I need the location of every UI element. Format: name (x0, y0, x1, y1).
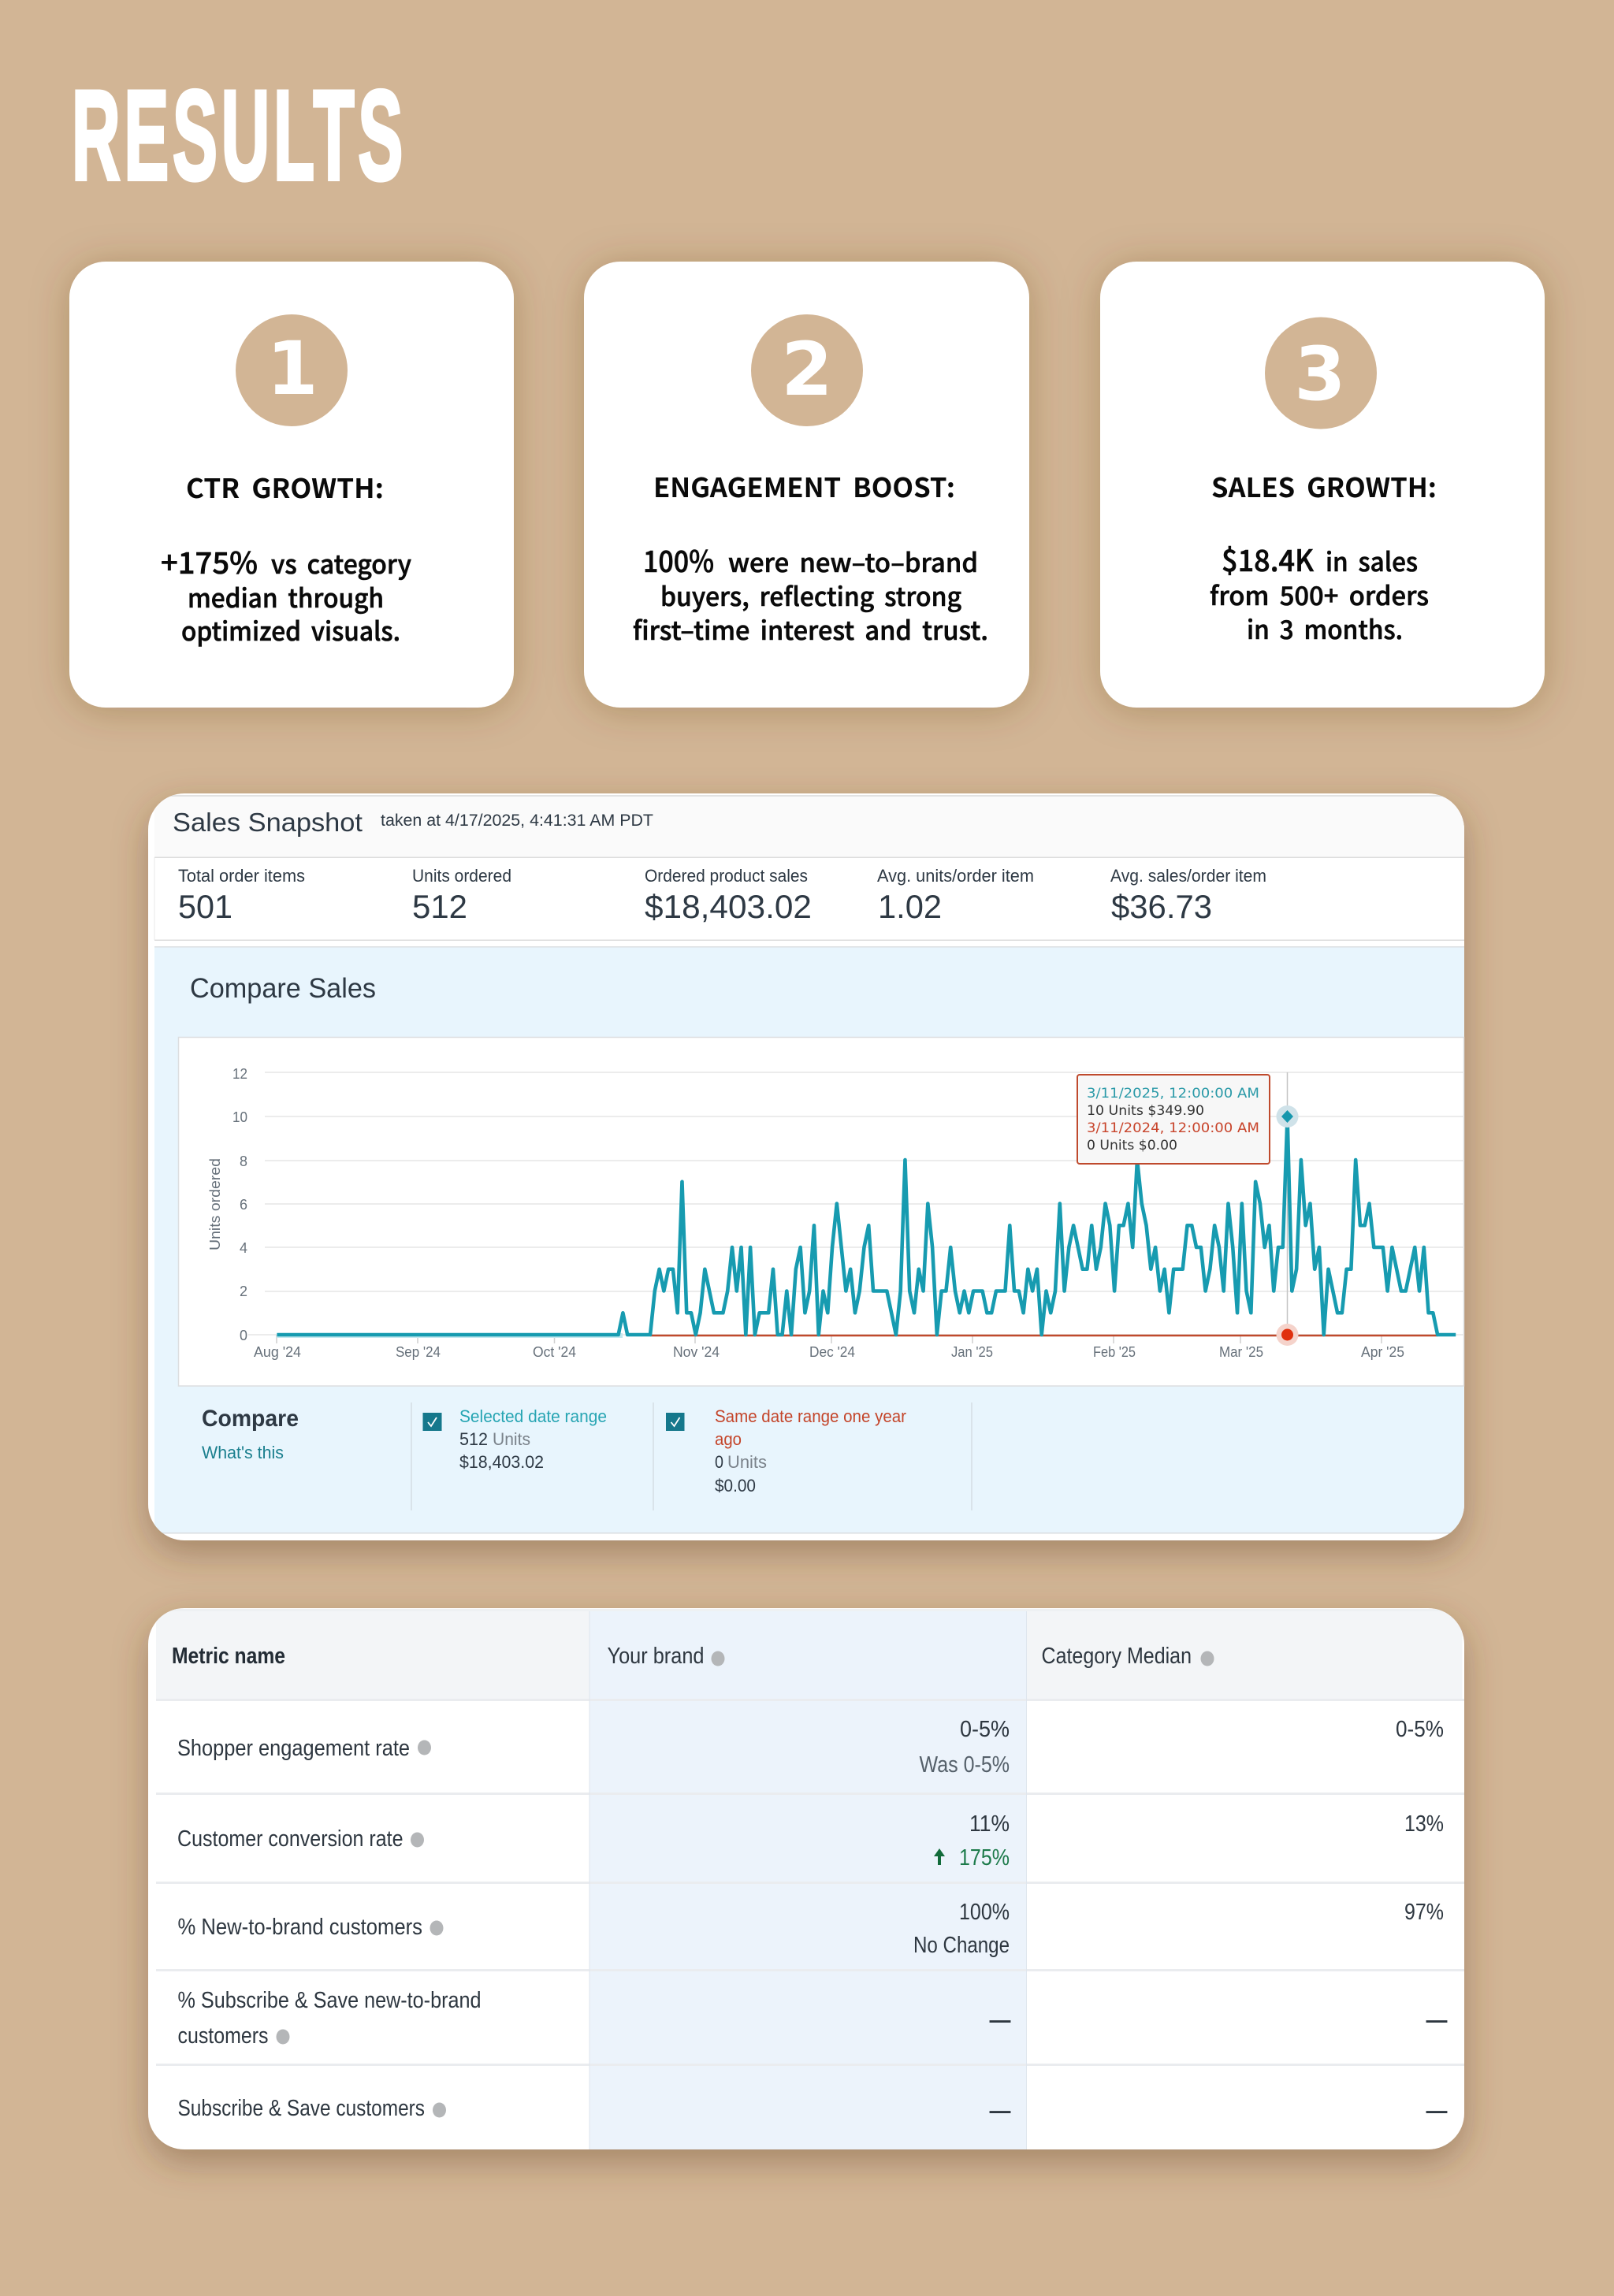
text block: engagement details: 100% (643, 537, 714, 581)
text block: sales details (1210, 537, 1429, 647)
line chart: units ordered (178, 1037, 1464, 1386)
legend: same date range one year ago: $0.00 (715, 1476, 756, 1495)
y axis labels: 4 (240, 1240, 247, 1256)
legend heading (202, 1406, 299, 1462)
metrics row (178, 866, 1266, 925)
row: subscribe and save new-to-brand customers: — (990, 2008, 1010, 2033)
y axis labels (232, 1066, 247, 1343)
panel: sales snapshot screenshot (148, 793, 1464, 1540)
x axis labels: Aug '24 (254, 1344, 301, 1360)
metrics row: 1.02 (878, 888, 942, 925)
heading: sales growth: SALES GROWTH: (1211, 466, 1437, 505)
metrics row: $36.73 (1111, 888, 1212, 925)
table header: Category Median (1042, 1644, 1192, 1669)
text block: CTR growth details: +175% (161, 539, 258, 582)
row: subscribe and save new-to-brand customers: % Subscribe & Save new-to-brand (178, 1988, 481, 2013)
icon: up arrow (934, 1848, 945, 1865)
icon: number 2 badge: 2 (781, 327, 833, 413)
legend: same date range one year ago: 0 (715, 1452, 723, 1472)
text block: CTR growth details: optimized visuals. (181, 611, 400, 648)
heading: sales snapshot (173, 808, 653, 837)
text block: CTR growth details: vs category (271, 544, 411, 581)
metrics row: Avg. units/order item (877, 866, 1034, 886)
row: new-to-brand customers: No Change (913, 1933, 1010, 1958)
row: customer conversion rate: 11% (969, 1811, 1010, 1837)
text block: sales details: in sales (1326, 541, 1418, 579)
legend: same date range one year ago: ago (715, 1429, 742, 1449)
metrics row: Avg. sales/order item (1110, 866, 1266, 886)
y axis title: Units ordered (207, 1158, 223, 1250)
row: subscribe and save customers: — (1426, 2098, 1447, 2123)
row: subscribe and save new-to-brand customers (178, 1988, 1447, 2049)
icon: number 3 badge (1265, 317, 1377, 429)
tooltip: 0 Units $0.00 (1087, 1138, 1177, 1154)
icon: number 3 badge: 3 (1294, 332, 1346, 418)
hover line (1286, 1072, 1288, 1335)
legend: same date range one year ago: Units (727, 1452, 767, 1472)
row: shopper engagement rate: Was 0-5% (919, 1752, 1010, 1778)
tooltip: 10 Units $349.90 (1087, 1103, 1204, 1119)
icon: number 2 badge (751, 314, 863, 426)
row: customer conversion rate: Customer conversion rate (177, 1826, 404, 1852)
heading: compare sales: Compare Sales (190, 973, 376, 1004)
row: customer conversion rate (177, 1811, 1444, 1871)
legend: same date range one year ago: Same date range one year (715, 1406, 906, 1426)
row: subscribe and save customers: Subscribe & Save customers (178, 2096, 425, 2121)
legend heading: Compare (202, 1406, 299, 1432)
icon: number 1 badge: 1 (266, 326, 318, 412)
tooltip: 3/11/2024, 12:00:00 AM (1087, 1120, 1259, 1136)
table header: Your brand (607, 1644, 705, 1669)
heading: CTR growth: CTR GROWTH: (186, 467, 384, 506)
title: RESULTS (72, 65, 407, 206)
row: customer conversion rate: 13% (1404, 1811, 1444, 1837)
row: shopper engagement rate: Shopper engagement rate (177, 1736, 410, 1761)
x axis labels: Nov '24 (673, 1344, 720, 1360)
y axis labels: 10 (232, 1109, 247, 1125)
row: subscribe and save customers: — (990, 2098, 1010, 2123)
legend: selected date range (422, 1406, 607, 1472)
marker: prior year point (1277, 1324, 1299, 1346)
row: new-to-brand customers (178, 1900, 1444, 1958)
metrics row: $18,403.02 (645, 888, 812, 925)
row: new-to-brand customers: % New-to-brand customers (178, 1915, 422, 1940)
table header: Metric name (172, 1644, 285, 1669)
legend: same date range one year ago (666, 1406, 906, 1495)
legend: selected date range: Selected date range (459, 1406, 607, 1426)
heading: engagement boost: ENGAGEMENT BOOST: (653, 466, 955, 505)
tooltip (1077, 1075, 1270, 1164)
legend: selected date range: 512 (459, 1429, 488, 1449)
row: shopper engagement rate: 0-5% (1396, 1717, 1444, 1742)
compare legend (202, 1402, 972, 1510)
y axis labels: 8 (240, 1154, 247, 1169)
heading: sales snapshot: Sales Snapshot (173, 808, 363, 837)
metrics row: Total order items (178, 866, 305, 886)
row: new-to-brand customers: 97% (1404, 1900, 1444, 1925)
row: customer conversion rate: 175% (959, 1845, 1010, 1871)
table header (172, 1644, 1214, 1669)
text block: sales details: $18.4K (1222, 537, 1315, 580)
x axis labels (254, 1344, 1404, 1360)
y axis labels: 12 (232, 1066, 247, 1082)
metrics row: 512 (412, 888, 467, 925)
y axis labels: 6 (240, 1197, 247, 1213)
x axis labels: Sep '24 (396, 1344, 441, 1360)
tooltip: 3/11/2025, 12:00:00 AM (1087, 1086, 1259, 1102)
text block: engagement details (633, 537, 988, 648)
x axis labels: Apr '25 (1361, 1344, 1404, 1360)
text block: CTR growth details: median through (188, 578, 384, 615)
row: shopper engagement rate (177, 1717, 1444, 1778)
y axis labels: 2 (240, 1284, 247, 1299)
text block: engagement details: were new–to–brand (728, 542, 978, 580)
row: subscribe and save customers (178, 2096, 1447, 2123)
text block: sales details: from 500+ orders (1210, 575, 1429, 613)
legend heading: What's this (202, 1443, 284, 1462)
series: same date range one year ago (650, 1335, 1437, 1336)
text block: sales details: in 3 months. (1247, 609, 1403, 647)
x axis labels: Jan '25 (951, 1344, 993, 1360)
metrics row: Units ordered (412, 866, 511, 886)
icon: number 1 badge (236, 314, 348, 426)
heading: sales snapshot: taken at 4/17/2025, 4:41:31 AM PDT (381, 812, 653, 830)
text block: CTR growth details (161, 539, 411, 648)
row: shopper engagement rate: 0-5% (960, 1717, 1010, 1742)
x axis labels: Oct '24 (533, 1344, 576, 1360)
marker: selected date point (1277, 1105, 1299, 1128)
x axis labels: Mar '25 (1219, 1344, 1263, 1360)
legend: selected date range: $18,403.02 (459, 1452, 544, 1472)
x axis labels: Feb '25 (1093, 1344, 1136, 1360)
row: subscribe and save new-to-brand customers: customers (178, 2023, 268, 2049)
row: subscribe and save new-to-brand customers: — (1426, 2008, 1447, 2033)
panel: engagement boost card (584, 262, 1029, 708)
panel: CTR growth card (69, 262, 514, 708)
series: selected date range (277, 1116, 1456, 1335)
metrics row: Ordered product sales (645, 866, 808, 886)
text block: engagement details: buyers, reflecting strong (660, 576, 961, 614)
panel: sales growth card (1100, 262, 1545, 708)
y axis labels: 0 (240, 1328, 247, 1343)
text block: engagement details: first–time interest and trust. (633, 610, 988, 648)
row: new-to-brand customers: 100% (959, 1900, 1010, 1925)
metrics row: 501 (178, 888, 232, 925)
legend: selected date range: Units (493, 1429, 530, 1449)
x axis labels: Dec '24 (809, 1344, 855, 1360)
panel: brand metrics table (148, 1608, 1464, 2149)
